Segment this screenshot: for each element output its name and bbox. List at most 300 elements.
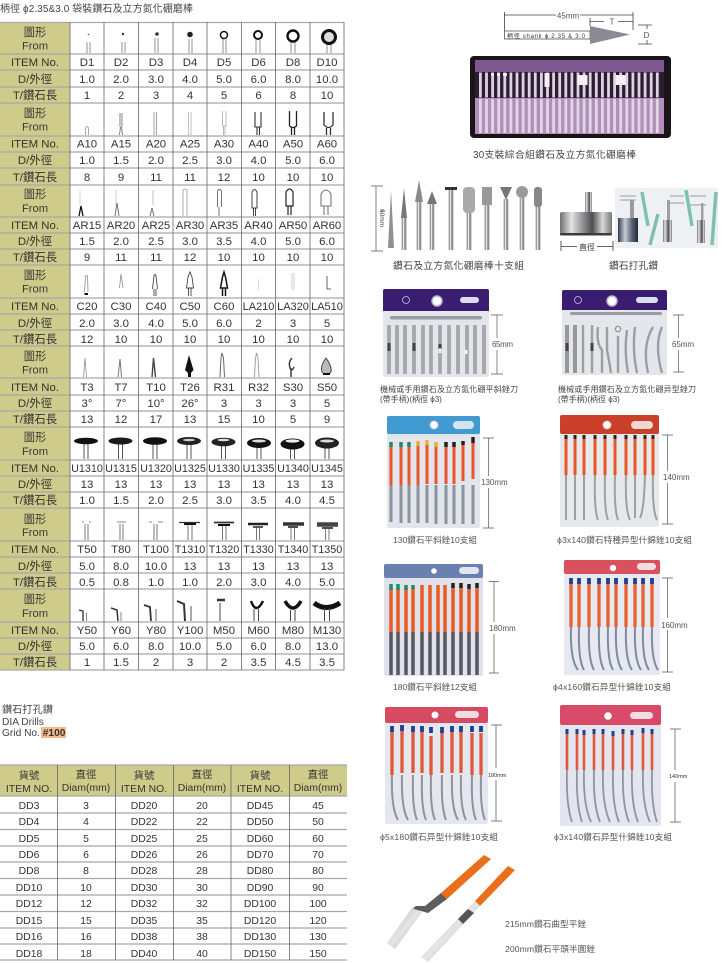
- photo: diamond hole drills: [560, 188, 718, 252]
- table block: AR series: 9: [84, 252, 90, 264]
- table block: C and LA series: C30: [111, 301, 131, 313]
- caption: flat file set: 機械或手用鑽石及立方氮化硼平斜銼刀: [380, 384, 518, 394]
- table block: D series: [11, 26, 338, 102]
- table block: T, R and S series: 26°: [181, 398, 199, 410]
- table block: D series: T/鑽石長: [13, 88, 58, 102]
- table block: T, R and S series: T7: [114, 382, 128, 394]
- table block: C and LA series: 4.0: [148, 318, 164, 330]
- table rows: 28: [196, 866, 208, 877]
- table block: C and LA series: T/鑽石長: [13, 332, 58, 346]
- heading: DIA drills: [2, 703, 66, 739]
- diagram: shank dimensions: D: [644, 31, 650, 40]
- table block: Y and M series: T/鑽石長: [13, 655, 58, 669]
- table block: U series: U1330: [208, 463, 240, 475]
- product card: 3x140 shaped file set: [560, 705, 688, 826]
- table block: C and LA series: 10: [150, 334, 162, 346]
- table rows: 130: [309, 932, 327, 943]
- table block: Y and M series: Y50: [77, 625, 97, 637]
- table header: 直徑: [76, 768, 96, 781]
- table block: AR series: 5.0: [285, 236, 301, 248]
- product card: 4x160 shaped file set: [564, 560, 688, 675]
- table block: T disc series: [11, 513, 342, 589]
- table block: AR series: AR60: [313, 220, 341, 232]
- table rows: DD40: [131, 949, 157, 960]
- table rows: 8: [83, 866, 89, 877]
- table block: T disc series: 3.0: [251, 577, 266, 589]
- table rows: 45: [312, 801, 324, 812]
- table block: Y and M series: 3.5: [319, 657, 335, 669]
- table rows: DD3: [19, 801, 40, 812]
- table block: T disc series: 4.0: [285, 577, 301, 589]
- table rows: 70: [312, 850, 324, 861]
- table block: D series: 6.0: [251, 74, 266, 86]
- table block: D series: D8: [286, 57, 300, 69]
- table block: U series: 3.5: [251, 495, 266, 507]
- icons: Y and M series flames and cups: [79, 600, 340, 621]
- table rows: 35: [196, 916, 208, 927]
- table block: C and LA series: From: [22, 284, 48, 296]
- table block: A series: 2.5: [182, 155, 198, 167]
- table block: A series: From: [22, 122, 48, 134]
- photo: 215mm curved flat file: [387, 855, 491, 949]
- table block: AR series: 11: [150, 252, 162, 264]
- table block: U series: 13: [218, 479, 230, 491]
- table block: T disc series: 0.8: [113, 577, 129, 589]
- photo: ten-piece grinding pin set: [371, 180, 542, 251]
- table block: D series: 5.0: [216, 74, 232, 86]
- table header: 貨號: [134, 769, 155, 782]
- table block: D series: D1: [80, 57, 94, 69]
- table rows: 50: [312, 817, 324, 828]
- caption: 4x160 shaped file set: ϕ4x160鑽石异型什錦銼10支組: [553, 681, 671, 692]
- table rows: DD12: [16, 899, 42, 910]
- table block: T disc series: 0.5: [79, 577, 95, 589]
- table rows: DD18: [16, 949, 42, 960]
- table block: C and LA series: 12: [81, 334, 93, 346]
- table block: Y and M series: D/外徑: [18, 640, 52, 653]
- table block: A series: 9: [118, 172, 124, 184]
- table block: U series: [11, 431, 343, 507]
- table block: T disc series: From: [22, 527, 48, 539]
- table rows: 22: [196, 817, 208, 828]
- table block: Y and M series: 1.5: [113, 657, 129, 669]
- table rows: DD4: [19, 817, 40, 828]
- table block: D series: 4: [187, 90, 193, 102]
- table block: A series: D/外徑: [18, 154, 52, 167]
- table rows: 150: [309, 949, 327, 960]
- table rows: 3: [83, 801, 89, 812]
- table block: A series: 10: [321, 172, 333, 184]
- table block: T, R and S series: 13: [184, 414, 196, 426]
- table block: T, R and S series: [11, 350, 337, 426]
- table block: A series: A25: [180, 138, 200, 150]
- table block: T disc series: T50: [77, 544, 97, 556]
- table block: D series: D10: [317, 57, 337, 69]
- table block: C and LA series: C20: [77, 301, 97, 313]
- table block: Y and M series: M80: [282, 625, 304, 637]
- table block: T disc series: ITEM No.: [11, 544, 59, 556]
- table block: T disc series: 10.0: [145, 561, 167, 573]
- table rows: 40: [196, 949, 208, 960]
- table rows: DD60: [247, 834, 273, 845]
- table block: D series: 1: [84, 90, 90, 102]
- table block: A series: 10: [252, 172, 265, 184]
- table block: U series: 13: [287, 479, 299, 491]
- table header: [6, 768, 342, 795]
- table block: T disc series: 2.0: [216, 577, 232, 589]
- table block: AR series: 4.0: [251, 236, 266, 248]
- caption: ten-piece set: 鑽石及立方氮化硼磨棒十支組: [393, 259, 524, 272]
- table rows: DD45: [247, 801, 273, 812]
- table rows: 90: [312, 883, 324, 894]
- table header: 直徑: [308, 768, 328, 781]
- table rows: DD6: [19, 850, 40, 861]
- table block: C and LA series: C40: [146, 301, 166, 313]
- table block: A series: A50: [283, 138, 303, 150]
- table block: D series: 2: [118, 90, 124, 102]
- table rows: DD16: [16, 932, 42, 943]
- table block: U series: 2.0: [148, 495, 164, 507]
- table rows: DD30: [131, 883, 157, 894]
- table block: D series: ITEM No.: [11, 57, 59, 69]
- product card: 5x180 shaped file set: 180mm: [488, 773, 507, 779]
- table block: C and LA series: 6.0: [216, 318, 232, 330]
- table block: Y and M series: 3: [187, 657, 193, 669]
- table block: U series: 4.0: [285, 495, 301, 507]
- table block: A series: 1.0: [79, 155, 95, 167]
- table block: Y and M series: 4.5: [285, 657, 301, 669]
- table block: T, R and S series: 5: [290, 414, 296, 426]
- product card: 130 flat file set: [387, 416, 508, 528]
- table block: T disc series: T100: [143, 544, 169, 556]
- table block: T disc series: T1320: [209, 544, 239, 556]
- table rows: DD15: [16, 916, 42, 927]
- table rows: DD35: [131, 916, 157, 927]
- table block: AR series: [11, 188, 341, 264]
- caption: flat file set: (帶手柄)(柄徑 ϕ3): [380, 394, 442, 404]
- table block: T, R and S series: 13: [81, 414, 93, 426]
- product card: shaped file set with handle, 65mm: 65mm: [672, 340, 694, 349]
- table block: T, R and S series: R31: [214, 382, 234, 394]
- table block: A series: T/鑽石長: [13, 170, 58, 184]
- table block: AR series: 3.0: [182, 236, 198, 248]
- table block: T, R and S series: T/鑽石長: [13, 412, 58, 426]
- table block: T, R and S series: 12: [115, 414, 127, 426]
- table block: D series: 3.0: [148, 74, 164, 86]
- caption: shaped file set: (帶手柄)(柄徑 ϕ3): [558, 394, 620, 404]
- table block: C and LA series: LA510: [311, 301, 343, 313]
- table rows: DD100: [244, 899, 276, 910]
- photo: ten-piece grinding pin set: 60mm: [378, 209, 385, 227]
- grid number highlight: [41, 727, 66, 738]
- table block: T disc series: T1330: [243, 544, 274, 556]
- table block: AR series: AR30: [176, 220, 204, 232]
- table rows: 38: [196, 932, 208, 943]
- table block: D series: D/外徑: [18, 73, 52, 86]
- table rows: DD130: [244, 932, 276, 943]
- table block: Y and M series: 1: [84, 657, 90, 669]
- table block: U series: U1325: [174, 463, 206, 475]
- table header: ITEM NO.: [237, 784, 283, 795]
- table header: ITEM NO.: [6, 784, 52, 795]
- table header: Diam(mm): [294, 783, 342, 794]
- table block: U series: 1.0: [79, 495, 95, 507]
- table block: T disc series: 8.0: [113, 561, 129, 573]
- table rows: DD90: [247, 883, 273, 894]
- table block: T, R and S series: 15: [218, 414, 230, 426]
- table block: U series: 13: [184, 479, 196, 491]
- table block: C and LA series: 5: [324, 318, 330, 330]
- table block: T disc series: 13: [252, 561, 265, 573]
- table block: Y and M series: 5.0: [216, 641, 232, 653]
- table block: D series: 8: [290, 90, 296, 102]
- product card: 4x160 shaped file set: 160mm: [661, 621, 688, 630]
- heading: DIA drills: Grid No. #100: [2, 728, 66, 739]
- table block: Y and M series: 2: [153, 657, 159, 669]
- table block: Y and M series: Y80: [146, 625, 166, 637]
- product card: 180 flat file set: [384, 564, 516, 676]
- table rows: 80: [312, 866, 324, 877]
- table block: U series: U1340: [277, 463, 309, 475]
- table rows: DD25: [131, 834, 157, 845]
- table block: A series: A40: [248, 138, 269, 150]
- table block: AR series: 10: [218, 252, 230, 264]
- table block: D series: From: [22, 40, 48, 52]
- product card: flat file set with handle, 65mm: [383, 289, 513, 377]
- table rows: 6: [83, 850, 89, 861]
- table block: A series: [11, 107, 337, 184]
- table rows: DD70: [247, 850, 273, 861]
- table block: C and LA series: 3.0: [113, 318, 129, 330]
- table block: D series: D6: [251, 57, 266, 69]
- table block: C and LA series: 10: [184, 334, 196, 346]
- table block: AR series: 圖形: [24, 188, 46, 201]
- table rows: DD20: [131, 801, 157, 812]
- table block: C and LA series: C50: [180, 301, 200, 313]
- table block: AR series: 1.5: [79, 236, 95, 248]
- table block: T, R and S series: 3: [290, 398, 296, 410]
- table block: T disc series: 5.0: [79, 561, 95, 573]
- table block: C and LA series: 3: [290, 318, 296, 330]
- table block: C and LA series: LA210: [243, 301, 274, 313]
- diagram: shank dimensions: T: [610, 18, 615, 26]
- table block: U series: 13: [81, 479, 93, 491]
- table block: Y and M series: 10.0: [179, 641, 201, 653]
- table block: C and LA series: D/外徑: [18, 317, 52, 330]
- table block: D series: 4.0: [182, 74, 198, 86]
- product card: 180 flat file set: 180mm: [489, 624, 516, 633]
- table rows: DD50: [247, 817, 273, 828]
- table block: C and LA series: 2.0: [79, 318, 95, 330]
- table block: Y and M series: M130: [313, 625, 341, 637]
- table block: U series: 13: [150, 479, 162, 491]
- table block: C and LA series: LA320: [277, 301, 309, 313]
- table block: T disc series: 13: [218, 561, 230, 573]
- table block: D series: 10.0: [316, 74, 338, 86]
- table block: A series: 2.0: [148, 155, 164, 167]
- table block: Y and M series: [11, 593, 341, 669]
- table block: D series: 5: [221, 90, 227, 102]
- icons: T disc series wheels: [82, 522, 338, 540]
- table block: AR series: 11: [115, 252, 127, 264]
- caption: shaped file set: 機械或手用鑽石及立方氮化硼异型銼刀: [558, 384, 696, 394]
- title: shank heading: 柄徑 ϕ2.35&3.0 袋裝鑽石及立方氮化硼磨棒: [0, 2, 193, 15]
- table rows: 26: [196, 850, 208, 861]
- table block: T disc series: 1.0: [182, 577, 198, 589]
- label: 200mm file: 200mm鑽石平頭半圓銼: [505, 943, 595, 954]
- table block: U series: U1320: [140, 463, 172, 475]
- table block: T, R and S series: 3°: [82, 398, 92, 410]
- caption: 3x140 shaped file set: ϕ3x140鑽石异型什錦銼10支組: [554, 831, 672, 842]
- table block: T, R and S series: 10: [252, 414, 265, 426]
- table rows: DD80: [247, 866, 273, 877]
- table block: A series: 6.0: [319, 155, 335, 167]
- table block: T, R and S series: T10: [146, 382, 166, 394]
- table block: T disc series: T1310: [175, 544, 205, 556]
- table header: ITEM NO.: [121, 784, 167, 795]
- caption: 30-piece set: 30支裝綜合組鑽石及立方氮化硼磨棒: [473, 148, 636, 161]
- table block: AR series: AR25: [142, 220, 170, 232]
- caption: 180 flat file set: 180鑽石平斜銼12支組: [393, 681, 477, 692]
- table block: A series: 12: [218, 172, 230, 184]
- table block: C and LA series: 2: [255, 318, 262, 330]
- table block: U series: U1310: [71, 463, 103, 475]
- table block: AR series: 10: [287, 252, 299, 264]
- table block: D series: 8.0: [285, 74, 301, 86]
- table block: C and LA series: [11, 269, 343, 346]
- table block: T, R and S series: T3: [80, 382, 94, 394]
- product card: 3x140 special file set: [560, 415, 690, 527]
- photo: diamond hole drills: 直徑: [579, 242, 595, 252]
- table rows: DD120: [244, 916, 276, 927]
- table block: Y and M series: 5.0: [79, 641, 95, 653]
- table block: AR series: 3.5: [216, 236, 232, 248]
- table block: A series: 10: [287, 172, 299, 184]
- product card: flat file set with handle, 65mm: 65mm: [492, 340, 513, 349]
- table rows: 12: [80, 899, 92, 910]
- table rows: 16: [80, 932, 92, 943]
- table block: AR series: 2.0: [113, 236, 129, 248]
- product card: 3x140 shaped file set: 140mm: [669, 774, 688, 780]
- table header: 貨號: [19, 769, 40, 782]
- table block: AR series: 12: [184, 252, 196, 264]
- table block: A series: A20: [146, 138, 166, 150]
- table block: T, R and S series: T26: [180, 382, 200, 394]
- table block: T, R and S series: 7°: [116, 398, 126, 410]
- table block: Y and M series: ITEM No.: [11, 625, 59, 637]
- table block: T disc series: 1.0: [148, 577, 164, 589]
- caption: 5x180 shaped file set: ϕ5x180鑽石异型什錦銼10支組: [380, 831, 498, 842]
- table rows: DD5: [19, 834, 40, 845]
- table header: 直徑: [192, 768, 212, 781]
- table block: C and LA series: 10: [218, 334, 230, 346]
- table block: A series: A30: [214, 138, 234, 150]
- product card: shaped file set with handle, 65mm: [562, 290, 694, 375]
- table block: Y and M series: Y100: [177, 625, 203, 637]
- table block: AR series: 2.5: [148, 236, 164, 248]
- table rows: 60: [312, 834, 324, 845]
- table block: T disc series: T/鑽石長: [13, 575, 58, 589]
- table block: Y and M series: 圖形: [24, 593, 46, 606]
- table block: U series: U1335: [243, 463, 274, 475]
- table block: T, R and S series: R32: [248, 382, 269, 394]
- table block: D series: D5: [217, 57, 231, 69]
- table block: AR series: 10: [321, 252, 333, 264]
- table rows: DD10: [16, 883, 42, 894]
- table rows: 18: [80, 949, 92, 960]
- table block: C and LA series: 10: [321, 334, 333, 346]
- table rows: DD8: [19, 866, 40, 877]
- table block: AR series: From: [22, 203, 48, 215]
- icons: A series cylinders: [86, 111, 333, 135]
- product card: 5x180 shaped file set: [385, 707, 507, 824]
- table rows: 20: [196, 801, 208, 812]
- icons: D series ball points: [87, 30, 336, 53]
- diagram: shank dimensions: 45mm: [557, 12, 579, 20]
- table rows: DD38: [131, 932, 157, 943]
- diagram: shank dimensions: [504, 12, 652, 44]
- table block: U series: ITEM No.: [11, 463, 59, 475]
- table rows: 100: [309, 899, 327, 910]
- table block: U series: 圖形: [24, 431, 46, 444]
- table block: Y and M series: From: [22, 608, 48, 620]
- table block: Y and M series: 8.0: [148, 641, 164, 653]
- table block: D series: 圖形: [24, 26, 46, 39]
- table: diamond drill sizes: [0, 765, 347, 960]
- table block: T, R and S series: 5: [324, 398, 330, 410]
- table block: T disc series: 13: [184, 561, 196, 573]
- product card: 130 flat file set: 130mm: [481, 478, 508, 487]
- table block: T, R and S series: ITEM No.: [11, 382, 59, 394]
- table block: U series: U1345: [311, 463, 343, 475]
- table block: C and LA series: 10: [115, 334, 127, 346]
- table block: U series: 13: [252, 479, 265, 491]
- table block: D series: 6: [255, 90, 262, 102]
- table block: Y and M series: 6.0: [113, 641, 129, 653]
- table rows: 120: [309, 916, 327, 927]
- table block: A series: A15: [111, 138, 131, 150]
- table block: Y and M series: 3.5: [251, 657, 266, 669]
- table block: AR series: AR20: [107, 220, 135, 232]
- table block: AR series: 10: [252, 252, 265, 264]
- table block: U series: 13: [321, 479, 333, 491]
- table rows: 30: [196, 883, 208, 894]
- table rows: 25: [196, 834, 208, 845]
- table block: Y and M series: 8.0: [285, 641, 301, 653]
- table block: A series: 11: [184, 172, 196, 184]
- photo: 200mm half-round file: [421, 866, 515, 962]
- table block: A series: 8: [84, 172, 90, 184]
- table block: U series: 2.5: [182, 495, 198, 507]
- table block: U series: T/鑽石長: [13, 493, 58, 507]
- table block: AR series: T/鑽石長: [13, 250, 58, 264]
- table block: A series: 3.0: [216, 155, 232, 167]
- table block: C and LA series: ITEM No.: [11, 301, 59, 313]
- table block: T, R and S series: S30: [283, 382, 303, 394]
- table rows: [16, 801, 327, 960]
- table block: T disc series: 5.0: [319, 577, 335, 589]
- table block: AR series: AR50: [279, 220, 307, 232]
- table block: AR series: ITEM No.: [11, 220, 59, 232]
- table block: U series: 4.5: [319, 495, 335, 507]
- table block: T disc series: 13: [321, 561, 333, 573]
- table block: T, R and S series: 9: [324, 414, 330, 426]
- icons: taper and special shapes: [84, 353, 331, 377]
- table block: C and LA series: 圖形: [24, 269, 46, 282]
- caption: 130 flat file set: 130鑽石平斜銼10支組: [393, 534, 477, 545]
- table block: Y and M series: M60: [247, 625, 270, 637]
- table block: A series: 1.5: [113, 155, 129, 167]
